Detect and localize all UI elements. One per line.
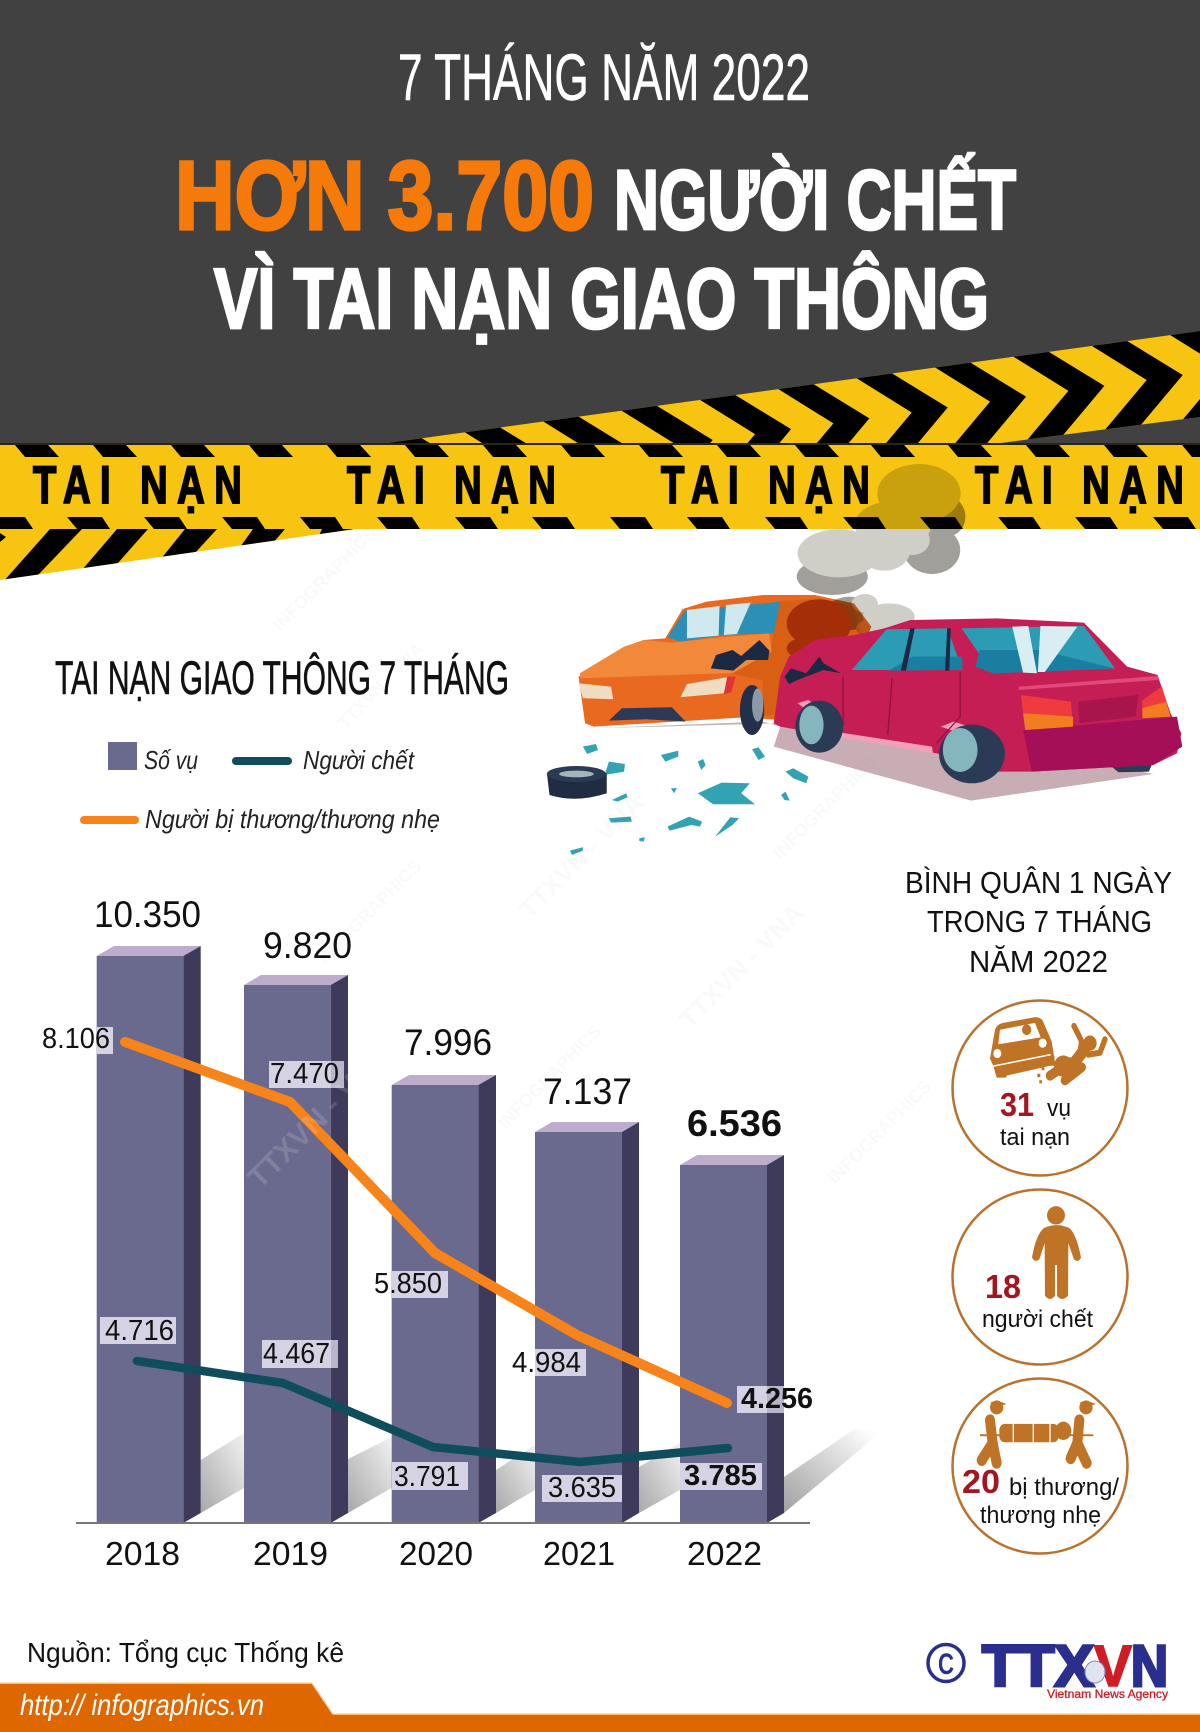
watermarks: INFOGRAPHICS [269,523,380,635]
watermarks: TTXVN - VNA [673,897,810,1034]
death labels [100,1315,762,1504]
bar 2018 [97,946,201,1523]
legend: số vụ: Số vụ [144,745,198,775]
year labels [105,1535,762,1572]
circle: deaths [952,1190,1128,1364]
upper chevron caution tape [388,331,1200,443]
watermarks: INFOGRAPHICS [494,1021,605,1133]
copyright mark [928,1644,964,1682]
watermarks: TTXVN - VNA [334,639,428,733]
year labels: 2022 [687,1535,762,1572]
watermarks: INFOGRAPHICS [824,1076,935,1188]
tape label 3: TAI NẠN [661,455,870,514]
year labels: 2020 [399,1535,473,1572]
legend [84,742,440,834]
daily average heading [905,865,1172,979]
bar values: 9.820 [263,925,352,966]
logo letters: V [1094,1634,1132,1699]
line: người bị thương [125,1042,727,1403]
logo letters: TTX [982,1634,1094,1699]
logo letters [982,1634,1168,1699]
ground shadow [594,722,1153,801]
title line 1: NGƯỜI CHẾT [614,153,1016,247]
title highlight: hơn 3.700: HƠN 3.700 [175,141,594,250]
header panel [0,0,1200,444]
chart title: TAI NẠN GIAO THÔNG 7 THÁNG [55,651,509,704]
year labels: 2019 [253,1535,328,1572]
year labels: 2018 [105,1535,180,1572]
bar shadows [201,1428,880,1513]
injured labels: 8.106 [42,1023,110,1055]
watermarks: INFOGRAPHICS [314,856,425,968]
icon: stretcher bearers [980,1400,1096,1463]
death labels: 4.467 [263,1338,330,1370]
car wheels [795,701,1005,783]
smoke [787,464,965,658]
copyright mark: C [938,1648,954,1681]
year labels: 2021 [543,1535,615,1572]
icon: person [1032,1206,1081,1299]
logo: TTXVN [928,1634,1168,1701]
heading: 7 tháng năm 2022: 7 THÁNG NĂM 2022 [398,40,810,114]
bar 2020 [392,1075,496,1523]
bar values [94,894,782,1144]
footer band [0,1683,1200,1732]
bar 2019 [244,975,348,1523]
legend: số vụ [108,742,198,775]
injured labels: 4.984 [512,1347,581,1379]
logo letters: N [1131,1634,1168,1699]
bar chart [76,894,880,1572]
bar 2022 [680,1155,784,1523]
injured labels: 7.470 [270,1058,339,1090]
far wheel of red car [1103,757,1155,772]
daily average heading: NĂM 2022 [969,944,1108,979]
website url: http:// infographics.vn [20,1689,264,1722]
debris [570,744,808,855]
line: người chết [137,1361,728,1462]
bar 2021 [535,1122,639,1523]
bar values: 7.996 [404,1022,492,1063]
illustration: car crash [547,464,1182,855]
icon: car hitting motorbike [990,1017,1105,1083]
injured labels: 4.256 [741,1383,813,1415]
tape label 1: TAI NẠN [33,455,242,514]
death labels: 3.791 [394,1461,460,1493]
stat: 31 vụ tai nạn: 31 [1000,1086,1034,1123]
watermarks: INFOGRAPHICS [769,751,880,863]
source note: Nguồn: Tổng cục Thống kê [27,1637,344,1668]
injured labels [42,1023,813,1415]
title line 2: VÌ TAI NẠN GIAO THÔNG [214,251,989,347]
death labels: 4.716 [105,1315,174,1347]
lower-left chevron caution tape [0,529,355,580]
stat: 18 người chết [982,1268,1093,1333]
injured labels: 5.850 [374,1268,442,1300]
daily average heading: TRONG 7 THÁNG [927,904,1152,939]
circle: accidents [952,1000,1128,1176]
logo tagline: Vietnam News Agency [1047,1687,1168,1701]
red car [774,618,1182,772]
watermarks: TTXVN - VNA [242,1038,398,1195]
stat: 20 bị thương [962,1463,1119,1529]
death labels: 3.635 [548,1472,616,1504]
orange car [579,595,871,735]
bar values: 7.137 [543,1071,632,1112]
logo globe [1085,1661,1105,1683]
watermarks: TTXVN - VNA [513,787,650,924]
tape label 4: TAI NẠN [975,455,1184,514]
loose tyre [547,766,607,799]
bar values: 6.536 [687,1103,782,1144]
stat: 31 vụ tai nạn: tai nạn [1000,1124,1070,1151]
stat: 20 bị thương: bị thương/ [1009,1474,1119,1501]
bar values: 10.350 [94,894,201,935]
stat: 20 bị thương: 20 [962,1463,1000,1500]
death labels: 3.785 [684,1460,757,1492]
stat: 18 người chết: người chết [982,1306,1093,1333]
stat: 31 vụ tai nạn [1000,1086,1071,1151]
main caution tape band [0,443,1200,529]
stat: 31 vụ tai nạn: vụ [1047,1095,1071,1122]
line value labels [42,1023,813,1504]
watermarks [242,523,935,1195]
stat: 18 người chết: 18 [985,1268,1021,1305]
legend: người chết: Người chết [303,745,416,775]
stat: 20 bị thương: thương nhẹ [980,1502,1101,1529]
circle: injured [952,1378,1128,1554]
tape label 2: TAI NẠN [347,455,556,514]
daily average heading: BÌNH QUÂN 1 NGÀY [905,865,1172,900]
legend: người bị thương: Người bị thương/thương nhẹ [145,804,440,834]
